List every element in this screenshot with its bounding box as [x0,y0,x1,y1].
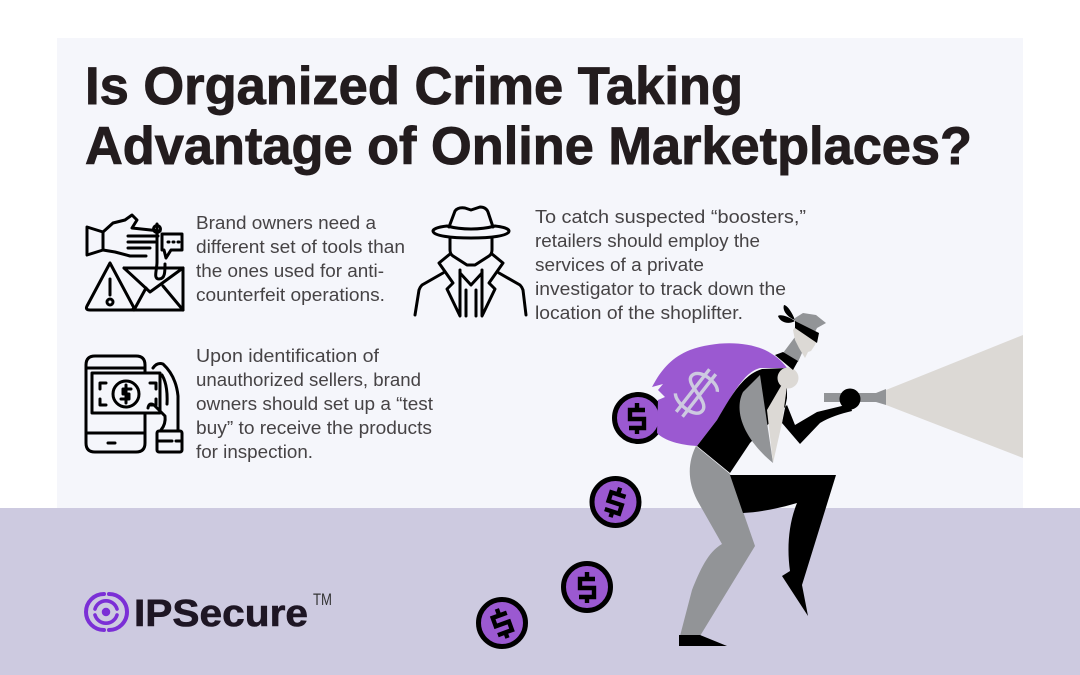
icon: phishing hand and envelope [86,215,183,310]
mask [795,321,819,343]
text: private investigator: investigator to track down the [535,279,786,299]
text: test buy: owners should set up a “test [196,394,433,414]
coin 4 [478,600,526,646]
logo wordmark: IPSecure [134,593,308,635]
hair [795,313,826,332]
money bag [652,343,787,446]
flashlight [824,389,886,405]
text: brand owners: different set of tools than [196,237,405,257]
text: brand owners: the ones used for anti- [196,261,384,281]
title: Is Organized Crime Taking [85,57,743,116]
text: test buy: for inspection. [196,442,313,462]
text: private investigator: location of the shoplifter. [535,303,743,323]
coin 3 [564,564,610,610]
dollar sign on bag [667,362,725,424]
icon: detective [415,207,526,316]
cape [740,375,773,463]
illustration: burglar with money bag [652,305,886,646]
boot [679,635,727,646]
face and beard [793,326,817,358]
text: test buy [196,346,433,462]
neck and collar [783,337,805,362]
text: brand owners: counterfeit operations. [196,285,385,305]
coin 1 [614,394,662,442]
torso [697,368,852,473]
panel: bottom band [0,508,1080,675]
trademark: TM [313,590,332,609]
text: private investigator: retailers should employ the [535,231,760,251]
grey leg [680,446,755,636]
text: brand owners: Brand owners need a [196,213,377,233]
bandana knot [778,305,795,323]
text: test buy: buy” to receive the products [196,418,432,438]
text: private investigator: services of a private [535,255,704,275]
title [85,57,972,176]
logo mark [86,594,127,630]
light beam [886,335,1023,458]
logo: IPSecure [86,590,332,635]
arm highlight [767,386,787,463]
title: Advantage of Online Marketplaces? [85,117,972,176]
text: test buy: Upon identification of [196,346,380,366]
text: private investigator [535,207,806,323]
text: test buy: unauthorized sellers, brand [196,370,421,390]
text: private investigator: To catch suspected “boosters,” [535,207,806,227]
panel: content background [57,38,1023,508]
black leg [730,475,836,616]
coin 2 [592,478,639,526]
text: brand owners [196,213,405,305]
icon: phone payment [86,356,182,452]
fist [840,388,860,410]
